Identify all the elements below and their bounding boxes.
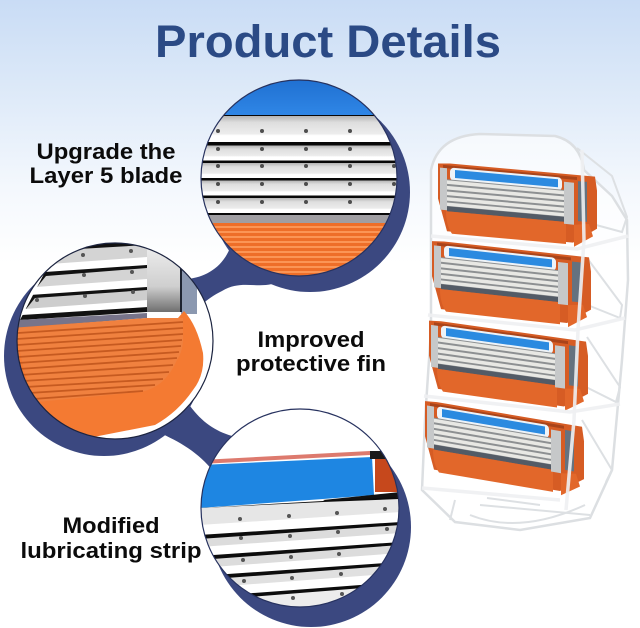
ribbed panel	[17, 318, 183, 402]
cartridge 1	[438, 162, 597, 249]
detail circle: protective fin	[18, 244, 204, 438]
circle outline	[201, 409, 399, 607]
pink line	[212, 451, 370, 464]
orange body	[10, 311, 203, 442]
label: modified lubricating strip	[20, 513, 201, 563]
clear case body	[422, 134, 628, 530]
product photo: four cartridges in clear case	[422, 134, 628, 530]
blades	[20, 243, 148, 320]
label: upgrade the layer 5 blade: Layer 5 blade	[30, 163, 183, 188]
grey bar	[18, 313, 147, 328]
blades	[202, 497, 398, 606]
title: Product Details	[155, 16, 501, 67]
label: modified lubricating strip: lubricating strip	[20, 538, 201, 563]
detail circle: lubricating strip	[202, 427, 398, 606]
label: improved protective fin: Improved	[258, 327, 364, 352]
orange ribs	[17, 322, 183, 399]
circle outline	[201, 80, 397, 276]
cartridge 3	[429, 320, 588, 414]
grey bar	[200, 215, 400, 223]
label: upgrade the layer 5 blade: Upgrade the	[36, 139, 176, 164]
cartridge 2	[432, 240, 591, 330]
metal side clip	[147, 248, 181, 312]
label: improved protective fin: protective fin	[236, 351, 386, 376]
label: upgrade the layer 5 blade	[30, 139, 183, 188]
label: modified lubricating strip: Modified	[62, 513, 160, 538]
blue lubricating strip	[200, 457, 374, 508]
circle outline	[17, 243, 213, 439]
label: improved protective fin	[236, 327, 386, 376]
blue strip	[224, 80, 374, 115]
case inner lines	[450, 148, 627, 523]
orange fin	[212, 223, 386, 276]
orange end	[323, 451, 400, 504]
navy callout backdrop and connectors	[4, 92, 411, 627]
five blades	[200, 115, 400, 217]
clear case dividers and vertical edge	[422, 150, 628, 510]
detail circle: layer 5 blade	[200, 78, 400, 276]
cartridge 4	[425, 400, 584, 499]
